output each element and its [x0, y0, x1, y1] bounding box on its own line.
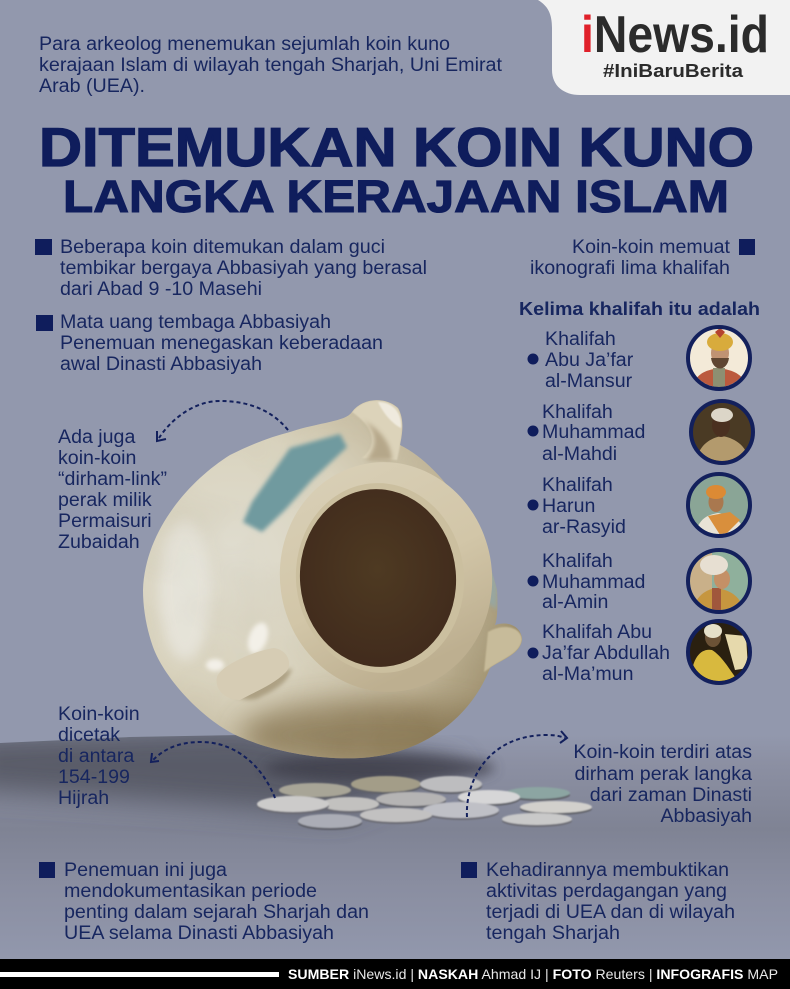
- portrait 1: [688, 327, 750, 390]
- bullet: periode penting: penting dalam sejarah Sharjah dan: [64, 901, 369, 923]
- bullet: periode penting: [39, 859, 369, 944]
- caliph 5 name: Ja’far Abdullah: [542, 642, 670, 664]
- bullet: guci tembikar: dari Abad 9 -10 Masehi: [60, 278, 262, 300]
- callout: mint dates: Hijrah: [58, 787, 109, 809]
- callout: mint dates: Koin-koin: [58, 703, 140, 725]
- caliph heading: Kelima khalifah itu adalah: [519, 298, 760, 319]
- caliph 2 name: [528, 401, 645, 465]
- callout: silver dirham: [573, 741, 752, 827]
- portrait 2: [691, 401, 753, 465]
- callout: mint dates: dicetak: [58, 724, 120, 746]
- bullet: periode penting: mendokumentasikan periode: [64, 880, 317, 902]
- caliph 4 name: Khalifah: [542, 550, 613, 572]
- caliph 3 name: Khalifah: [542, 474, 613, 496]
- caliph 3 name: Harun: [542, 495, 595, 517]
- callout: dirham-link: Zubaidah: [58, 531, 140, 553]
- bullet: mata uang tembaga: Penemuan menegaskan keberadaan: [60, 332, 383, 354]
- bullet: periode penting: UEA selama Dinasti Abbasiyah: [64, 922, 334, 944]
- caliph 5 name: Khalifah Abu: [542, 621, 652, 643]
- bullet: mata uang tembaga: Mata uang tembaga Abbasiyah: [60, 311, 331, 333]
- footer bar: [0, 959, 790, 989]
- callout: mint dates: di antara: [58, 745, 134, 767]
- bullet: ikonografi: Koin-koin memuat: [572, 236, 731, 258]
- bullet: ikonografi: ikonografi lima khalifah: [530, 257, 730, 279]
- bullet: guci tembikar: tembikar bergaya Abbasiyah yang berasal: [60, 257, 427, 279]
- intro text: Arab (UEA).: [39, 75, 145, 97]
- callout: mint dates: [58, 703, 140, 809]
- callout: silver dirham: dari zaman Dinasti: [590, 784, 752, 806]
- bullet: guci tembikar: Beberapa koin ditemukan dalam guci: [60, 236, 385, 258]
- portrait 5: [688, 621, 750, 684]
- portrait 4: [688, 550, 750, 614]
- caliph 1 name: Abu Ja’far: [545, 349, 634, 371]
- callout: silver dirham: Abbasiyah: [660, 805, 752, 827]
- bullet: mata uang tembaga: [36, 311, 383, 375]
- title: LANGKA KERAJAAN ISLAM: [63, 171, 729, 222]
- callout: dirham-link: koin-koin: [58, 447, 136, 469]
- table surface shadow: [0, 735, 790, 912]
- footer credits: SUMBER iNews.id | NASKAH Ahmad IJ | FOTO Reuters | INFOGRAFIS MAP: [288, 966, 778, 982]
- caliph 4 name: [528, 550, 645, 613]
- bullet: guci tembikar: [35, 236, 427, 300]
- jar opening: [293, 483, 463, 673]
- arrow: jar to dirham-link: [157, 401, 288, 441]
- callout: mint dates: 154-199: [58, 766, 130, 788]
- logo panel: [538, 0, 790, 95]
- title: DITEMUKAN KOIN KUNO: [39, 116, 754, 178]
- callout: dirham-link: [58, 426, 167, 553]
- caliph 2 name: Muhammad: [542, 421, 645, 443]
- caliph 1 name: [528, 328, 634, 392]
- jar left handle: [206, 620, 292, 700]
- portrait 3: [688, 474, 750, 538]
- logo wordmark: iNews.id: [581, 6, 769, 64]
- bullet: ikonografi: [530, 236, 755, 279]
- caliph 2 name: al-Mahdi: [542, 443, 617, 465]
- arrow: coins to mint dates: [151, 742, 275, 798]
- caliph 4 name: Muhammad: [542, 571, 645, 593]
- callout: silver dirham: dirham perak langka: [574, 763, 752, 785]
- bullet: aktivitas perdagangan: tengah Sharjah: [486, 922, 620, 944]
- caliph 3 name: [528, 474, 626, 538]
- caliph 2 name: Khalifah: [542, 401, 613, 423]
- caliph 5 name: al-Ma’mun: [542, 663, 633, 685]
- caliph 4 name: al-Amin: [542, 591, 608, 613]
- bullet: aktivitas perdagangan: aktivitas perdagangan yang: [486, 880, 727, 902]
- bullet: aktivitas perdagangan: [461, 859, 735, 944]
- callout: silver dirham: Koin-koin terdiri atas: [573, 741, 752, 763]
- intro text: kerajaan Islam di wilayah tengah Sharjah, Uni Emirat: [39, 54, 503, 76]
- intro text: [39, 33, 503, 97]
- caliph 3 name: ar-Rasyid: [542, 516, 626, 538]
- caliph 1 name: Khalifah: [545, 328, 616, 350]
- callout: dirham-link: “dirham-link”: [58, 468, 167, 490]
- title: [39, 116, 754, 222]
- intro text: Para arkeolog menemukan sejumlah koin kuno: [39, 33, 450, 55]
- callout: dirham-link: Permaisuri: [58, 510, 152, 532]
- coins: [257, 776, 592, 830]
- bullet: aktivitas perdagangan: Kehadirannya membuktikan: [486, 859, 729, 881]
- jar photo: [140, 395, 525, 769]
- arrow: coins to silver dirham: [467, 731, 567, 817]
- bullet: mata uang tembaga: awal Dinasti Abbasiyah: [60, 353, 262, 375]
- caliph 1 name: al-Mansur: [545, 370, 633, 392]
- logo hashtag: #IniBaruBerita: [603, 60, 744, 81]
- callout: dirham-link: Ada juga: [58, 426, 135, 448]
- callout: dirham-link: perak milik: [58, 489, 152, 511]
- bullet: periode penting: Penemuan ini juga: [64, 859, 227, 881]
- bullet: aktivitas perdagangan: terjadi di UEA dan di wilayah: [486, 901, 735, 923]
- jar inner lip: [287, 475, 473, 681]
- jar rim: [265, 448, 507, 706]
- caliph 5 name: [528, 621, 670, 685]
